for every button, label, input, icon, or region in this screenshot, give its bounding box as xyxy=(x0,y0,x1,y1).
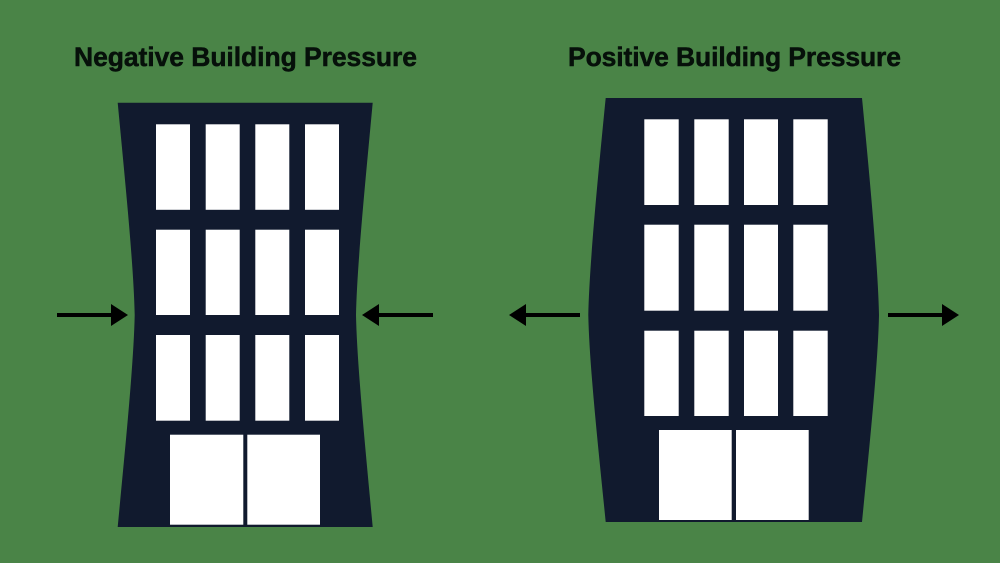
panel: negative pressure building xyxy=(118,103,373,527)
windows xyxy=(156,124,339,421)
doors xyxy=(170,435,320,525)
arrow: right side pointing inward xyxy=(362,304,433,326)
arrow: left side pointing outward xyxy=(509,304,580,326)
arrow: right side pointing outward xyxy=(888,304,959,326)
building body, sides bulging outward xyxy=(588,98,879,522)
panel: positive pressure building xyxy=(588,98,879,522)
arrow: left side pointing inward xyxy=(57,304,128,326)
windows xyxy=(644,119,828,416)
doors xyxy=(659,430,809,520)
title: negative building pressure: Negative Building Pressure xyxy=(74,42,417,72)
title: positive building pressure: Positive Building Pressure xyxy=(568,42,901,72)
building body, sides pinched inward xyxy=(118,103,373,527)
